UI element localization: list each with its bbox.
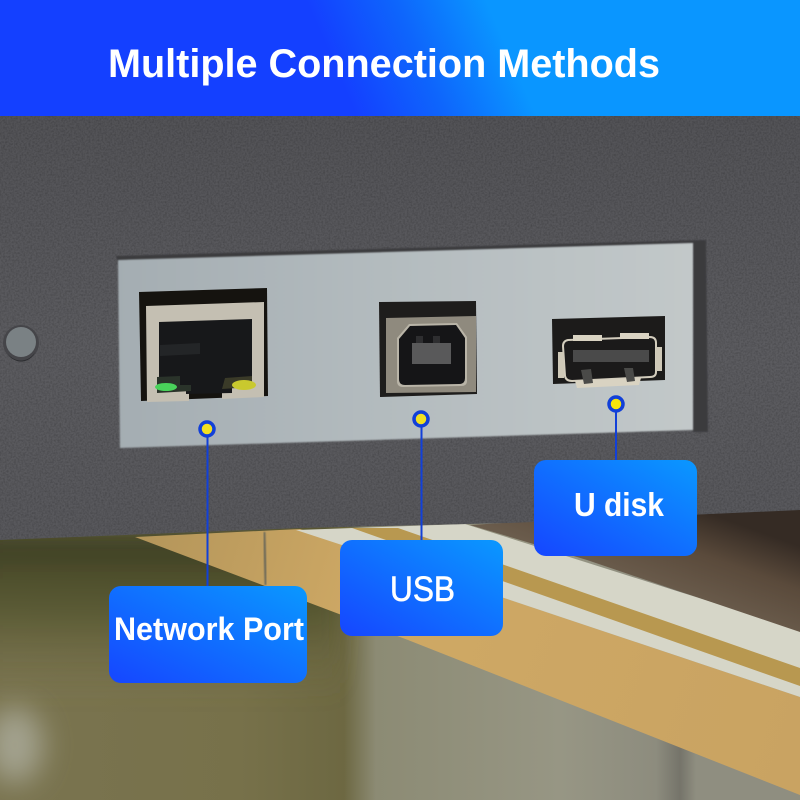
network port [139, 288, 268, 402]
label: U disk [534, 460, 697, 556]
USB type-B port [379, 301, 477, 397]
label: USB [340, 540, 503, 636]
label: U disk: U disk [574, 486, 665, 523]
leader: U disk [609, 397, 623, 461]
amber LED [232, 380, 256, 390]
label: USB: USB [390, 570, 455, 609]
label: Network Port: Network Port [114, 611, 304, 647]
USB type-A port [552, 316, 665, 388]
cardboard surface [470, 505, 800, 632]
background scene [0, 500, 800, 800]
title: Multiple Connection Methods [108, 42, 660, 86]
wooden shelf edge [135, 529, 800, 795]
leader: Network Port [200, 422, 214, 587]
device housing [0, 116, 800, 540]
leader: USB [414, 412, 428, 541]
white laminate strip with gold stripe [296, 524, 800, 697]
label: Network Port [109, 586, 307, 683]
header banner [0, 0, 800, 116]
round button [3, 325, 39, 362]
green LED [155, 383, 177, 391]
connector panel [116, 240, 708, 448]
